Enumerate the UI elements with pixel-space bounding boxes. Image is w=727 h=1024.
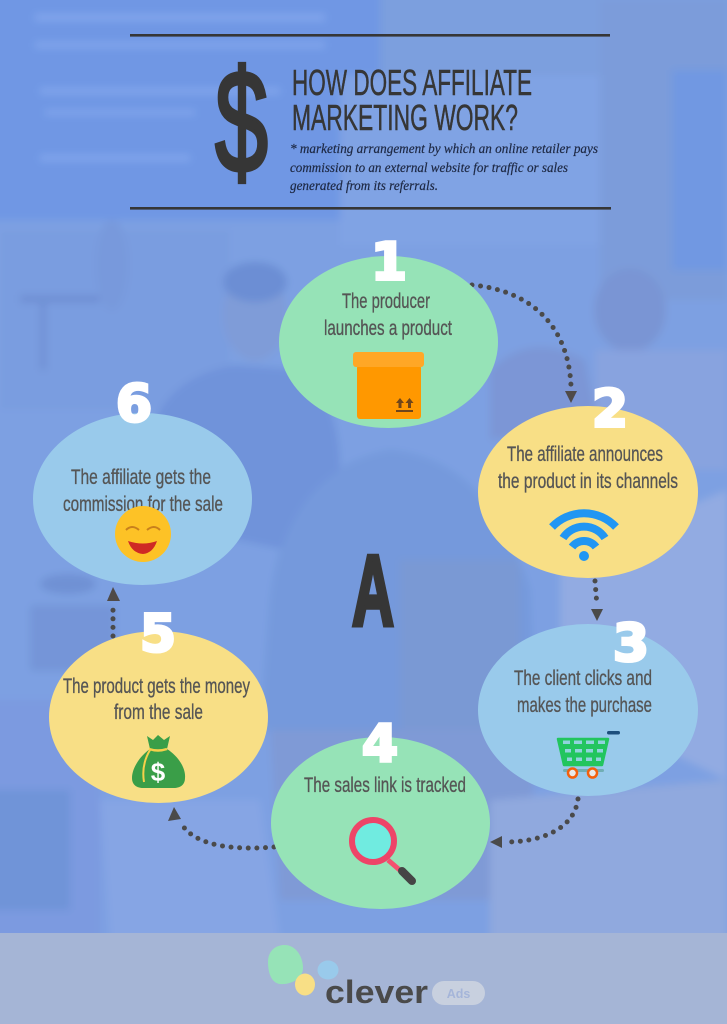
logo blobs xyxy=(268,945,338,996)
center letter A: A xyxy=(352,535,394,647)
step number 6: 6 xyxy=(116,374,152,434)
step 5 text xyxy=(63,675,250,724)
icon: money bag: $ xyxy=(151,757,166,787)
step 2 text: The affiliate announces xyxy=(507,443,663,466)
arrow: step 3 to 4 xyxy=(490,799,578,848)
panel: step 6 affiliate commission xyxy=(33,374,252,585)
logo pill xyxy=(432,981,485,1005)
panel: step 4 link tracked xyxy=(271,714,490,909)
arrow: step 5 to 6 xyxy=(107,587,120,636)
icon: box xyxy=(353,352,424,419)
logo: clever Ads xyxy=(268,945,485,1010)
step number 1: 1 xyxy=(371,232,407,292)
step 3 text: The client clicks and xyxy=(514,667,652,690)
panel: step 1 producer xyxy=(279,232,498,428)
step 5 text: from the sale xyxy=(114,701,203,724)
step 1 text: launches a product xyxy=(324,317,452,340)
step 3 text: makes the purchase xyxy=(517,694,652,717)
step number 4: 4 xyxy=(362,714,398,774)
step 1 text xyxy=(324,290,452,340)
step number 2: 2 xyxy=(592,380,628,440)
step 5 text: The product gets the money xyxy=(63,675,250,698)
icon: shopping cart xyxy=(558,731,620,778)
definition text xyxy=(290,142,599,194)
step 6 text xyxy=(63,466,223,516)
panel: step 2 affiliate announces xyxy=(478,380,698,578)
step 6 text: commission for the sale xyxy=(63,493,223,516)
arrow: step 4 to 5 xyxy=(168,807,274,848)
footer band xyxy=(0,933,727,1024)
step 4 text: The sales link is tracked xyxy=(304,774,466,797)
header: rules, dollar sign, title and definition xyxy=(130,34,611,210)
icon: dollar sign: $ xyxy=(215,40,268,203)
icon: smiling face xyxy=(115,506,171,562)
arrow: step 2 to 3 xyxy=(591,581,603,621)
panel: step 3 client purchase xyxy=(478,614,698,796)
step 3 text xyxy=(514,667,652,717)
title: MARKETING WORK? xyxy=(292,97,518,138)
logo pill: Ads xyxy=(447,987,470,1001)
step number 5: 5 xyxy=(140,604,176,664)
step 1 text: The producer xyxy=(342,290,430,313)
panel: step 5 product gets money xyxy=(49,604,268,803)
icon: money bag xyxy=(132,735,185,788)
logo wordmark: clever xyxy=(325,974,428,1010)
step number 3: 3 xyxy=(613,614,649,674)
definition text: generated from its referrals. xyxy=(290,179,438,194)
step 2 text xyxy=(498,443,678,493)
definition text: commission to an external website for traffic or sales xyxy=(290,161,569,176)
icon: wifi xyxy=(552,513,616,561)
icon: magnifying glass xyxy=(352,820,412,881)
step 6 text: The affiliate gets the xyxy=(71,466,211,489)
title: HOW DOES AFFILIATE xyxy=(292,62,532,103)
arrow: step 1 to 2 xyxy=(472,285,577,403)
definition text: * marketing arrangement by which an online retailer pays xyxy=(290,142,599,157)
title xyxy=(292,62,532,138)
